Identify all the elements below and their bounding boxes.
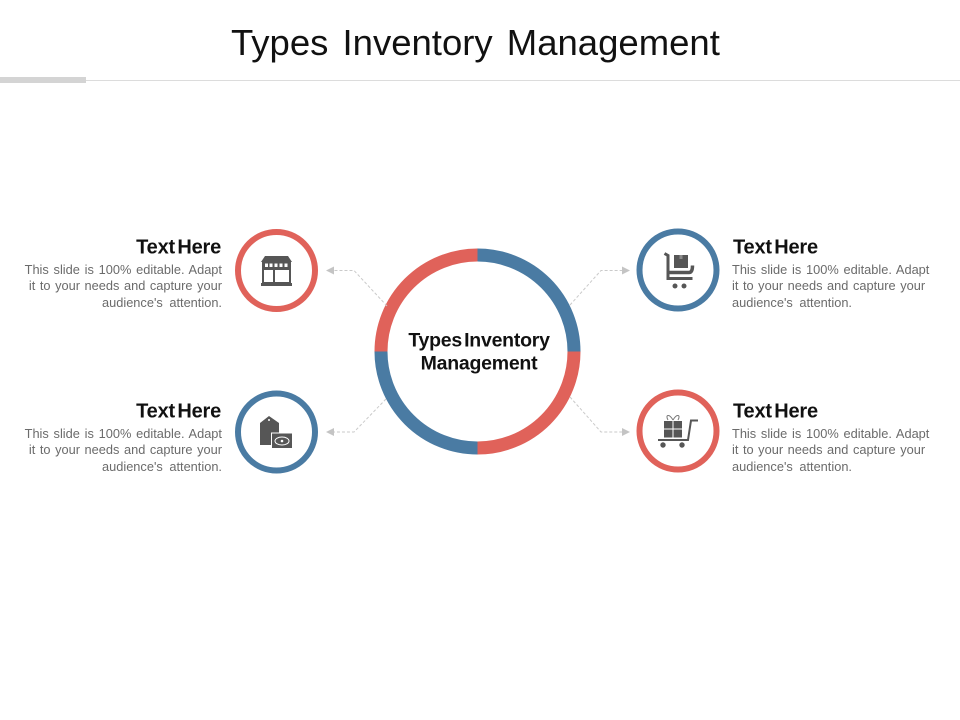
icon: store <box>261 256 292 286</box>
text block: top left: audience's attention. <box>102 295 222 310</box>
arrow: bottom left <box>326 399 386 436</box>
text block: top left: Text Here <box>136 236 221 258</box>
text block: top left: it to your needs and capture your <box>29 278 223 293</box>
arrow: bottom right <box>570 397 630 436</box>
text block: top left <box>25 236 223 310</box>
central label: Types Inventory <box>408 330 550 352</box>
central label: Management <box>421 352 538 374</box>
text block: bottom left <box>25 400 223 474</box>
text block: bottom left: This slide is 100% editable. Adapt <box>25 426 222 441</box>
central label <box>408 330 550 374</box>
circle: bottom left with price tag and money icon <box>238 394 315 470</box>
text block: top right: Text Here <box>733 236 818 258</box>
text block: bottom right: Text Here <box>733 400 818 422</box>
central ring <box>381 255 574 448</box>
text block: bottom right: it to your needs and capture your <box>732 442 926 457</box>
text block: top right: it to your needs and capture your <box>732 278 926 293</box>
arrow: top right <box>570 266 630 305</box>
text block: bottom left: audience's attention. <box>102 459 222 474</box>
circle: bottom right with gift cart icon <box>640 392 716 470</box>
text block: top right: audience's attention. <box>732 295 852 310</box>
title: Types Inventory Management <box>231 22 720 63</box>
text block: bottom left: Text Here <box>136 400 221 422</box>
circle: top right with cart box icon <box>640 232 716 308</box>
text block: bottom right: This slide is 100% editable. Adapt <box>732 426 930 441</box>
text block: top right: This slide is 100% editable. Adapt <box>732 262 930 277</box>
text block: top left: This slide is 100% editable. Adapt <box>25 262 222 277</box>
icon: tag and banknote <box>260 416 292 448</box>
text block: bottom left: it to your needs and capture your <box>29 442 223 457</box>
arrow: top left <box>326 266 387 306</box>
text block: bottom right <box>732 400 930 474</box>
icon: gift on trolley <box>658 415 698 448</box>
icon: cart with box <box>664 254 692 288</box>
text block: bottom right: audience's attention. <box>732 459 852 474</box>
text block: top right <box>732 236 930 310</box>
circle: top left with store icon <box>238 232 315 309</box>
